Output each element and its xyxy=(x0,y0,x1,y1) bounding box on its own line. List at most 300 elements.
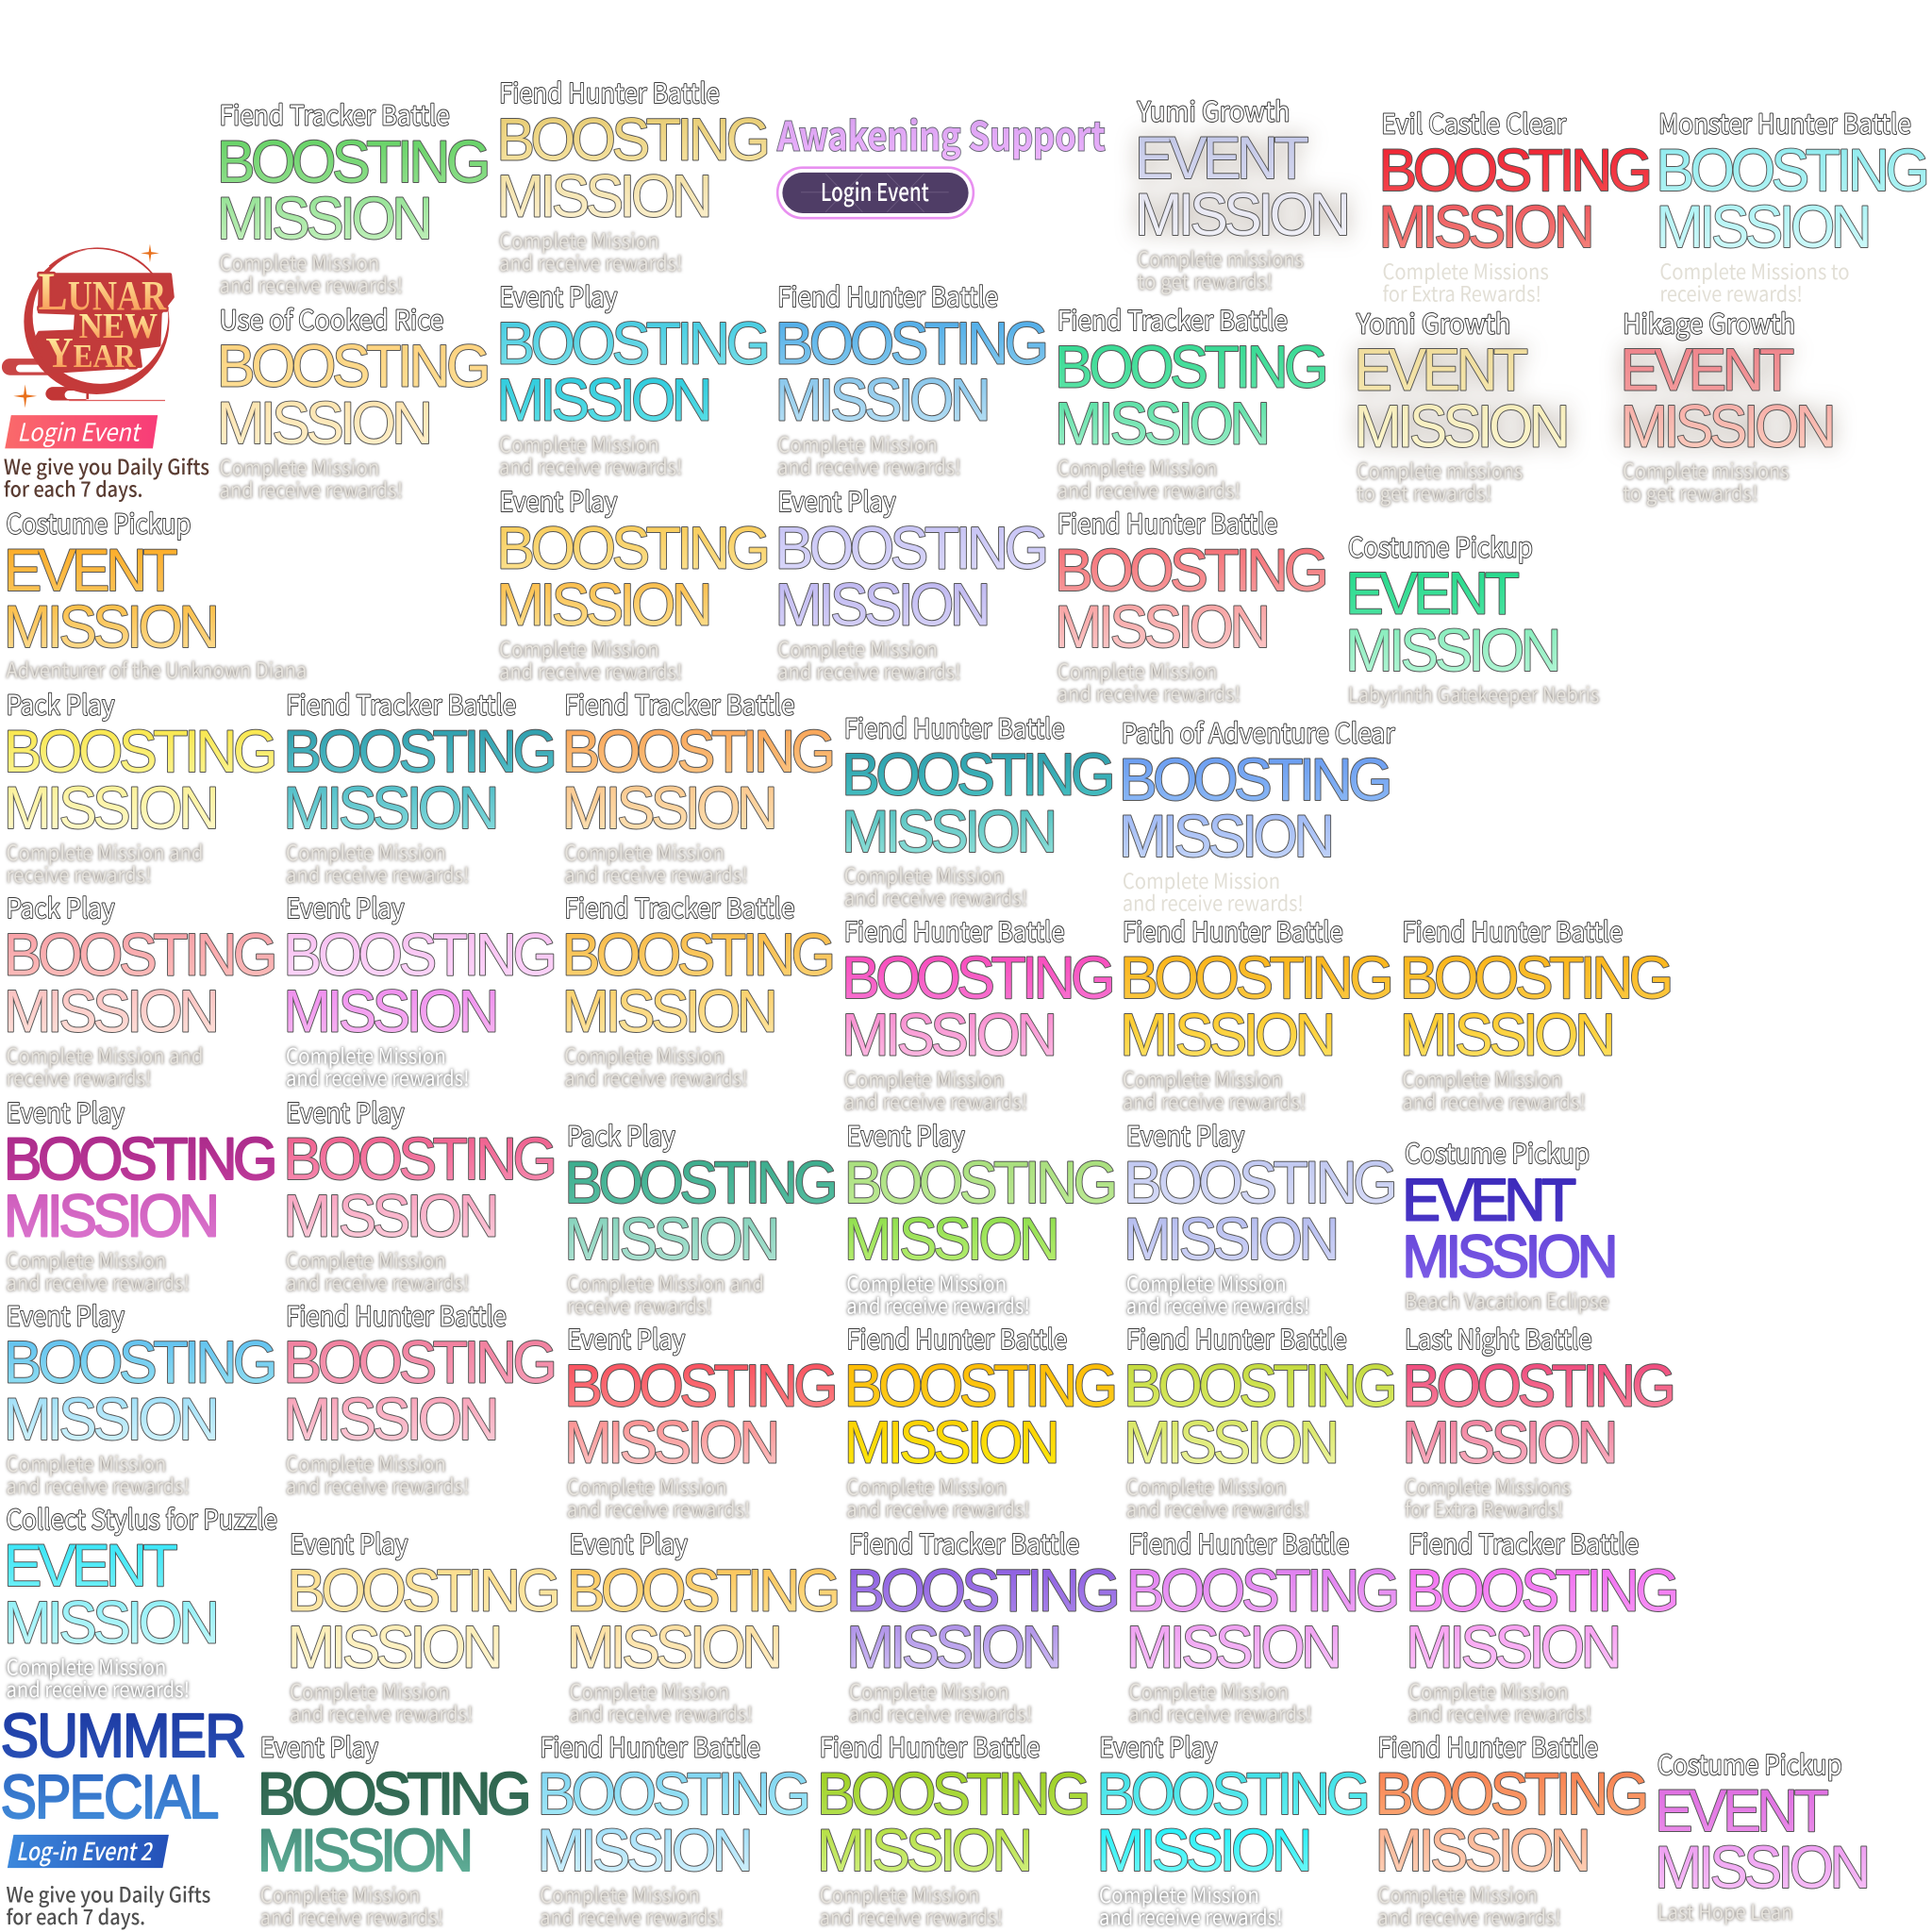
panel: Event Play lavender: Event Play xyxy=(777,481,896,520)
panel: Fiend Tracker Battle green: MISSION xyxy=(217,186,429,252)
panel: Fiend Tracker Battle orange: and receive rewards! xyxy=(564,858,748,889)
panel: Event Play red xyxy=(564,1319,835,1524)
panel: Use of Cooked Rice xyxy=(217,299,488,504)
panel: Fiend Tracker Battle green: and receive rewards! xyxy=(219,269,403,299)
panel: Event Play pale gold xyxy=(287,1524,558,1728)
panel: Fiend Hunter Battle teal: BOOSTING xyxy=(841,742,1112,808)
panel: Fiend Hunter Battle blue: Fiend Hunter Battle xyxy=(777,276,998,315)
panel: Fiend Hunter Battle peach xyxy=(1375,1727,1645,1931)
panel: Fiend Tracker Battle fuchsia: and receive rewards! xyxy=(1408,1698,1592,1728)
description: We give you Daily Gifts xyxy=(4,451,209,481)
panel: Fiend Hunter Battle chartreuse: Fiend Hunter Battle xyxy=(1126,1319,1347,1357)
panel: Event Play apricot: MISSION xyxy=(567,1614,779,1680)
panel: Event Play lime: and receive rewards! xyxy=(846,1291,1030,1321)
tag: log-in event 2: Log-in Event 2 xyxy=(16,1832,153,1868)
panel: Collect Stylus for Puzzle: MISSION xyxy=(4,1590,216,1656)
panel: Fiend Hunter Battle pink: Fiend Hunter Battle xyxy=(286,1295,507,1334)
panel: Event Play periwinkle: MISSION xyxy=(1124,1207,1336,1273)
panel: Fiend Hunter Battle magenta: MISSION xyxy=(841,1002,1054,1068)
panel: Use of Cooked Rice: Use of Cooked Rice xyxy=(219,299,443,338)
panel: Fiend Hunter Battle coral: BOOSTING xyxy=(1055,538,1325,604)
panel: Event Play sky: BOOSTING xyxy=(4,1330,275,1396)
panel: Event Play orchid: and receive rewards! xyxy=(286,1062,470,1092)
panel: Costume Pickup Eclipse: MISSION xyxy=(1402,1224,1614,1290)
panel: Event Play orchid: BOOSTING xyxy=(283,922,554,988)
panel: Yumi Growth event mission: EVENT xyxy=(1135,125,1307,192)
panel: Event Play sky: Event Play xyxy=(7,1295,125,1334)
panel: Fiend Hunter Battle gold one: Complete Mission xyxy=(1123,1063,1283,1093)
panel: Fiend Hunter Battle pink: Complete Mission xyxy=(286,1448,446,1478)
panel: Fiend Hunter Battle teal: MISSION xyxy=(841,799,1054,865)
panel: Event Play rose: MISSION xyxy=(283,1183,495,1249)
panel: Fiend Hunter Battle lime green: and receive rewards! xyxy=(820,1901,1003,1931)
panel: Fiend Hunter Battle lime green: Complete Mission xyxy=(820,1879,979,1909)
panel: Fiend Hunter Battle coral: and receive rewards! xyxy=(1058,677,1241,708)
panel: Fiend Hunter Battle ice blue xyxy=(537,1727,808,1931)
panel: Event Play periwinkle xyxy=(1124,1116,1394,1321)
panel: Event Play purple magenta: Complete Mission xyxy=(7,1244,166,1274)
panel: Event Play teal: Complete Mission xyxy=(499,429,659,459)
panel: Fiend Hunter Battle magenta: Fiend Hunter Battle xyxy=(844,911,1064,950)
panel: Fiend Tracker Battle deep teal: Complete Mission xyxy=(286,837,446,867)
panel: Costume Pickup Eclipse: EVENT xyxy=(1402,1167,1575,1233)
panel: Event Play red: BOOSTING xyxy=(564,1354,835,1420)
panel: Event Play apricot: Event Play xyxy=(569,1524,688,1562)
panel: Fiend Hunter Battle yellow: and receive rewards! xyxy=(499,247,683,277)
icon: lunar new year logo: YEAR xyxy=(45,328,136,376)
panel: Fiend Hunter Battle pink: MISSION xyxy=(283,1387,495,1453)
panel: Costume Pickup Diana: Adventurer of the Unknown Diana xyxy=(7,655,307,685)
panel: Event Play apricot: BOOSTING xyxy=(567,1557,838,1624)
panel: Hikage Growth event mission: Hikage Growth xyxy=(1623,303,1795,341)
panel: Last Night Battle: Last Night Battle xyxy=(1405,1319,1592,1357)
panel: Use of Cooked Rice: and receive rewards! xyxy=(219,474,403,504)
title: summer special xyxy=(1,1701,244,1831)
panel: Fiend Hunter Battle chartreuse xyxy=(1124,1319,1394,1524)
panel: Use of Cooked Rice: BOOSTING xyxy=(217,334,488,400)
panel: Yomi Growth event mission: Complete missions xyxy=(1357,456,1523,486)
panel: Costume Pickup Nebris xyxy=(1345,526,1599,709)
panel: Event Play lavender: Complete Mission xyxy=(777,633,938,663)
panel: Fiend Tracker Battle deep teal: MISSION xyxy=(283,775,495,841)
panel: Fiend Hunter Battle bright yellow: Fiend Hunter Battle xyxy=(846,1319,1067,1357)
description xyxy=(4,451,209,503)
panel: Fiend Hunter Battle teal: Fiend Hunter Battle xyxy=(844,708,1064,746)
button: login event: Login Event xyxy=(821,173,929,208)
panel: Fiend Hunter Battle gold two: BOOSTING xyxy=(1400,945,1671,1011)
panel: Last Night Battle: for Extra Rewards! xyxy=(1405,1493,1563,1524)
panel: Use of Cooked Rice: MISSION xyxy=(217,391,429,457)
panel: Fiend Tracker Battle fuchsia: Complete Mission xyxy=(1408,1675,1569,1706)
panel: Fiend Tracker Battle green: Fiend Tracker Battle xyxy=(219,95,450,134)
panel: Fiend Tracker Battle orange: BOOSTING xyxy=(562,719,832,785)
panel: Event Play aqua: and receive rewards! xyxy=(1099,1901,1283,1931)
panel: Event Play amber: and receive rewards! xyxy=(499,656,683,686)
panel: Event Play amber: MISSION xyxy=(496,572,708,638)
panel: Fiend Hunter Battle gold two: MISSION xyxy=(1400,1002,1612,1068)
panel: Costume Pickup Lean: Costume Pickup xyxy=(1657,1744,1842,1783)
panel: Fiend Hunter Battle gold two xyxy=(1400,911,1671,1116)
panel: Event Play lavender: MISSION xyxy=(775,572,987,638)
panel: Event Play amber xyxy=(496,481,767,686)
panel: Evil Castle Clear red: MISSION xyxy=(1379,194,1591,260)
panel: Fiend Hunter Battle peach: MISSION xyxy=(1375,1818,1588,1884)
panel: Event Play orchid xyxy=(283,888,554,1092)
panel: Pack Play pink: BOOSTING xyxy=(4,922,275,988)
panel: Event Play periwinkle: and receive rewards! xyxy=(1126,1291,1309,1321)
panel: Costume Pickup Eclipse xyxy=(1402,1133,1614,1315)
panel: Pack Play yellow: Pack Play xyxy=(7,685,114,724)
button: login event xyxy=(777,168,974,218)
panel: Event Play periwinkle: Complete Mission xyxy=(1126,1268,1287,1298)
panel: Event Play teal: and receive rewards! xyxy=(499,451,683,481)
panel: Event Play amber: BOOSTING xyxy=(496,515,767,581)
description: for each 7 days. xyxy=(4,473,143,503)
panel: Fiend Hunter Battle magenta: BOOSTING xyxy=(841,945,1112,1011)
panel: Event Play purple magenta xyxy=(4,1092,275,1297)
panel: Fiend Hunter Battle blue: Complete Mission xyxy=(777,429,938,459)
panel: Event Play sky: and receive rewards! xyxy=(7,1470,190,1500)
panel: Event Play pale gold: Complete Mission xyxy=(290,1675,450,1706)
panel: Fiend Hunter Battle orchid: Fiend Hunter Battle xyxy=(1128,1524,1349,1562)
panel: Event Play red: MISSION xyxy=(564,1410,776,1476)
panel: Event Play lavender: and receive rewards! xyxy=(777,656,961,686)
panel: Pack Play sea green xyxy=(564,1116,835,1321)
panel: Fiend Hunter Battle ice blue: MISSION xyxy=(537,1818,749,1884)
panel: Fiend Tracker Battle gold: and receive rewards! xyxy=(564,1062,748,1092)
panel: Fiend Hunter Battle pink: and receive rewards! xyxy=(286,1470,470,1500)
panel: Fiend Hunter Battle blue: and receive rewards! xyxy=(777,451,961,481)
panel: Summer Special login event xyxy=(1,1701,244,1931)
panel: Fiend Tracker Battle fuchsia: BOOSTING xyxy=(1406,1557,1676,1624)
panel: Costume Pickup Nebris: Costume Pickup xyxy=(1348,526,1533,565)
panel: Fiend Hunter Battle gold one: MISSION xyxy=(1120,1002,1332,1068)
panel: Yumi Growth event mission xyxy=(1135,92,1347,296)
panel: Yumi Growth event mission: to get rewards! xyxy=(1138,266,1273,296)
panel: Fiend Hunter Battle blue: BOOSTING xyxy=(775,311,1045,377)
panel: Pack Play pink: MISSION xyxy=(4,978,216,1044)
panel: Fiend Hunter Battle yellow xyxy=(496,73,767,277)
panel: Fiend Hunter Battle gold two: Fiend Hunter Battle xyxy=(1402,911,1623,950)
panel: Fiend Hunter Battle bright yellow: and receive rewards! xyxy=(846,1493,1030,1524)
panel: Costume Pickup Eclipse: Beach Vacation Eclipse xyxy=(1405,1285,1609,1315)
panel: Path of Adventure Clear xyxy=(1119,713,1395,917)
panel: Costume Pickup Lean xyxy=(1655,1744,1867,1926)
panel: Path of Adventure Clear: Complete Mission xyxy=(1123,865,1280,895)
panel: Costume Pickup Lean: Last Hope Lean xyxy=(1657,1896,1792,1926)
panel: Yomi Growth event mission: MISSION xyxy=(1354,394,1566,460)
panel: Collect Stylus for Puzzle: Collect Stylus for Puzzle xyxy=(7,1499,277,1538)
panel: Event Play lime xyxy=(844,1116,1115,1321)
description: for each 7 days. xyxy=(7,1901,145,1931)
panel: Event Play lime: Event Play xyxy=(846,1116,965,1155)
panel: Fiend Tracker Battle fuchsia: MISSION xyxy=(1406,1614,1618,1680)
panel: Fiend Tracker Battle deep teal: Fiend Tracker Battle xyxy=(286,685,516,724)
panel: Yumi Growth event mission: MISSION xyxy=(1135,182,1347,248)
panel: Event Play sky xyxy=(4,1295,275,1500)
panel: Fiend Hunter Battle lime green: MISSION xyxy=(817,1818,1029,1884)
panel: Fiend Hunter Battle blue: MISSION xyxy=(775,368,987,434)
panel: Evil Castle Clear red: BOOSTING xyxy=(1379,138,1649,204)
panel: Event Play teal: BOOSTING xyxy=(496,311,767,377)
panel: Monster Hunter Battle cyan xyxy=(1656,104,1926,308)
panel: Costume Pickup Diana: EVENT xyxy=(4,538,176,604)
panel: Event Play rose xyxy=(283,1092,554,1297)
panel: Fiend Tracker Battle violet: BOOSTING xyxy=(846,1557,1117,1624)
panel: Fiend Tracker Battle emerald: and receive rewards! xyxy=(1058,475,1241,505)
panel: Pack Play yellow: receive rewards! xyxy=(7,858,152,889)
panel: Yomi Growth event mission xyxy=(1354,303,1566,508)
title: summer special: SPECIAL xyxy=(1,1762,218,1831)
panel: Pack Play sea green: Pack Play xyxy=(567,1116,675,1155)
icon: lunar new year logo: LUNAR xyxy=(38,262,167,322)
panel: Fiend Hunter Battle yellow: BOOSTING xyxy=(496,107,767,173)
panel: Event Play rose: BOOSTING xyxy=(283,1126,554,1192)
panel: Fiend Tracker Battle gold: BOOSTING xyxy=(562,922,832,988)
panel: Fiend Hunter Battle yellow: Fiend Hunter Battle xyxy=(499,73,720,111)
panel: Event Play lavender: BOOSTING xyxy=(775,515,1045,581)
panel: Fiend Tracker Battle fuchsia: Fiend Tracker Battle xyxy=(1408,1524,1639,1562)
panel: Fiend Hunter Battle peach: Complete Mission xyxy=(1377,1879,1538,1909)
panel: Pack Play yellow: BOOSTING xyxy=(4,719,275,785)
panel: Fiend Hunter Battle lime green: BOOSTING xyxy=(817,1761,1088,1827)
panel: Pack Play sea green: BOOSTING xyxy=(564,1150,835,1216)
panel: Event Play lavender xyxy=(775,481,1045,686)
panel: Event Play red: Complete Mission xyxy=(567,1472,727,1502)
panel: Fiend Tracker Battle gold: Complete Mission xyxy=(564,1040,724,1070)
panel: Event Play forest green: and receive rewards! xyxy=(260,1901,443,1931)
panel: Fiend Hunter Battle orchid: and receive rewards! xyxy=(1128,1698,1312,1728)
panel: Fiend Tracker Battle emerald: Complete Mission xyxy=(1058,452,1217,482)
panel: Yomi Growth event mission: Yomi Growth xyxy=(1356,303,1510,341)
panel: Fiend Hunter Battle yellow: MISSION xyxy=(496,163,708,229)
panel: Fiend Hunter Battle teal xyxy=(841,708,1112,912)
panel: Monster Hunter Battle cyan: Monster Hunter Battle xyxy=(1658,104,1911,142)
panel: Fiend Hunter Battle lime green xyxy=(817,1727,1088,1931)
panel: Fiend Hunter Battle peach: and receive rewards! xyxy=(1377,1901,1561,1931)
panel: Fiend Hunter Battle bright yellow xyxy=(844,1319,1115,1524)
panel: Monster Hunter Battle cyan: Complete Missions to xyxy=(1659,256,1849,286)
panel: Hikage Growth event mission xyxy=(1621,303,1832,508)
panel: Event Play purple magenta: BOOSTING xyxy=(4,1126,275,1192)
panel: Fiend Tracker Battle violet: and receive rewards! xyxy=(849,1698,1033,1728)
panel: Event Play apricot: and receive rewards! xyxy=(569,1698,753,1728)
panel: Pack Play yellow: MISSION xyxy=(4,775,216,841)
panel: Fiend Hunter Battle magenta: and receive rewards! xyxy=(844,1086,1027,1116)
panel: Costume Pickup Lean: MISSION xyxy=(1655,1835,1867,1901)
panel: Fiend Tracker Battle orange xyxy=(562,685,832,889)
panel: Fiend Hunter Battle gold one: and receive rewards! xyxy=(1123,1086,1306,1116)
panel: Pack Play pink: Complete Mission and xyxy=(7,1040,204,1070)
panel: Fiend Hunter Battle peach: BOOSTING xyxy=(1375,1761,1645,1827)
panel: Awakening Support login event xyxy=(776,106,1106,218)
panel: Event Play sky: MISSION xyxy=(4,1387,216,1453)
panel: Fiend Tracker Battle orange: Complete Mission xyxy=(564,837,724,867)
panel: Collect Stylus for Puzzle xyxy=(4,1499,277,1704)
panel: Costume Pickup Eclipse: Costume Pickup xyxy=(1405,1133,1590,1172)
panel: Event Play forest green: Event Play xyxy=(260,1727,378,1766)
panel: Collect Stylus for Puzzle: Complete Mission xyxy=(7,1651,166,1681)
panel: Event Play pale gold: MISSION xyxy=(287,1614,499,1680)
panel: Event Play teal: MISSION xyxy=(496,368,708,434)
panel: Fiend Tracker Battle violet: Fiend Tracker Battle xyxy=(849,1524,1079,1562)
panel: Event Play red: Event Play xyxy=(567,1319,685,1357)
panel: Last Night Battle xyxy=(1402,1319,1673,1524)
panel: Costume Pickup Nebris: MISSION xyxy=(1345,618,1557,684)
title: summer special: SUMMER xyxy=(1,1701,244,1770)
panel: Fiend Tracker Battle green: Complete Mission xyxy=(219,247,379,277)
panel: Fiend Hunter Battle orchid: BOOSTING xyxy=(1126,1557,1397,1624)
panel: Costume Pickup Nebris: EVENT xyxy=(1345,561,1519,627)
panel: Fiend Hunter Battle teal: and receive rewards! xyxy=(844,882,1027,912)
panel: Fiend Tracker Battle emerald: BOOSTING xyxy=(1055,334,1325,400)
panel: Fiend Tracker Battle deep teal xyxy=(283,685,554,889)
panel: Collect Stylus for Puzzle: EVENT xyxy=(4,1533,176,1599)
panel: Costume Pickup Diana xyxy=(4,504,307,685)
panel: Fiend Hunter Battle gold two: Complete Mission xyxy=(1402,1063,1562,1093)
panel: Fiend Hunter Battle coral: Fiend Hunter Battle xyxy=(1058,504,1277,542)
panel: Fiend Hunter Battle magenta xyxy=(841,911,1112,1116)
panel: Evil Castle Clear red: for Extra Rewards! xyxy=(1382,278,1541,308)
panel: Lunar New Year login event xyxy=(2,244,209,503)
panel: Last Night Battle: MISSION xyxy=(1402,1410,1614,1476)
panel: Event Play pale gold: BOOSTING xyxy=(287,1557,558,1624)
panel: Fiend Hunter Battle pink: BOOSTING xyxy=(283,1330,554,1396)
panel: Fiend Hunter Battle peach: Fiend Hunter Battle xyxy=(1377,1727,1598,1766)
panel: Fiend Hunter Battle gold one: BOOSTING xyxy=(1120,945,1391,1011)
panel: Fiend Hunter Battle teal: Complete Mission xyxy=(844,860,1004,891)
description xyxy=(7,1879,210,1931)
heading: Awakening Support xyxy=(776,106,1106,162)
panel: Fiend Hunter Battle coral: MISSION xyxy=(1055,594,1267,660)
panel: Fiend Hunter Battle gold two: and receive rewards! xyxy=(1402,1086,1586,1116)
panel: Path of Adventure Clear: and receive rewards! xyxy=(1123,887,1304,917)
panel: Event Play teal xyxy=(496,276,767,481)
panel: Pack Play sea green: receive rewards! xyxy=(567,1291,712,1321)
panel: Hikage Growth event mission: Complete missions xyxy=(1623,456,1789,486)
panel: Event Play periwinkle: Event Play xyxy=(1126,1116,1244,1155)
panel: Event Play rose: and receive rewards! xyxy=(286,1267,470,1297)
panel: Event Play purple magenta: Event Play xyxy=(7,1092,125,1131)
panel: Evil Castle Clear red: Complete Missions xyxy=(1382,256,1549,286)
panel: Path of Adventure Clear: Path of Adventure Clear xyxy=(1122,713,1395,752)
panel: Event Play purple magenta: MISSION xyxy=(4,1183,216,1249)
panel: Fiend Tracker Battle green xyxy=(217,95,488,299)
panel: Fiend Hunter Battle coral xyxy=(1055,504,1325,708)
panel: Fiend Tracker Battle deep teal: BOOSTING xyxy=(283,719,554,785)
panel: Event Play orchid: MISSION xyxy=(283,978,495,1044)
panel: Fiend Tracker Battle fuchsia xyxy=(1406,1524,1676,1728)
panel: Fiend Hunter Battle chartreuse: BOOSTING xyxy=(1124,1354,1394,1420)
panel: Fiend Hunter Battle orchid: MISSION xyxy=(1126,1614,1339,1680)
panel: Monster Hunter Battle cyan: receive rewards! xyxy=(1659,278,1803,308)
panel: Pack Play sea green: MISSION xyxy=(564,1207,776,1273)
panel: Event Play orchid: Event Play xyxy=(286,888,404,926)
panel: Costume Pickup Diana: Costume Pickup xyxy=(7,504,191,542)
panel: Monster Hunter Battle cyan: BOOSTING xyxy=(1656,138,1926,204)
panel: Event Play aqua: BOOSTING xyxy=(1096,1761,1367,1827)
panel: Yomi Growth event mission: to get rewards! xyxy=(1357,477,1492,508)
panel: Event Play rose: Complete Mission xyxy=(286,1244,446,1274)
panel: Fiend Hunter Battle ice blue: and receive rewards! xyxy=(540,1901,724,1931)
panel: Event Play aqua: Complete Mission xyxy=(1099,1879,1259,1909)
panel: Event Play aqua: Event Play xyxy=(1099,1727,1217,1766)
panel: Event Play lime: Complete Mission xyxy=(846,1268,1007,1298)
panel: Hikage Growth event mission: EVENT xyxy=(1621,338,1793,404)
panel: Fiend Hunter Battle pink xyxy=(283,1295,554,1500)
panel: Fiend Hunter Battle gold one xyxy=(1120,911,1391,1116)
panel: Event Play lime: MISSION xyxy=(844,1207,1057,1273)
icon: lunar new year logo xyxy=(2,244,173,408)
panel: Yumi Growth event mission: Yumi Growth xyxy=(1137,92,1291,130)
panel: Event Play red: and receive rewards! xyxy=(567,1493,750,1524)
panel: Fiend Hunter Battle chartreuse: Complete Mission xyxy=(1126,1472,1287,1502)
panel: Fiend Hunter Battle bright yellow: BOOSTING xyxy=(844,1354,1115,1420)
panel: Event Play aqua: MISSION xyxy=(1096,1818,1308,1884)
panel: Pack Play pink: Pack Play xyxy=(7,888,114,926)
panel: Fiend Hunter Battle orchid xyxy=(1126,1524,1397,1728)
panel: Fiend Tracker Battle gold: Fiend Tracker Battle xyxy=(564,888,794,926)
panel: Event Play sky: Complete Mission xyxy=(7,1448,166,1478)
panel: Fiend Tracker Battle green: BOOSTING xyxy=(217,129,488,195)
panel: Hikage Growth event mission: to get rewards! xyxy=(1623,477,1758,508)
panel: Fiend Hunter Battle blue xyxy=(775,276,1045,481)
panel: Costume Pickup Nebris: Labyrinth Gatekeeper Nebris xyxy=(1348,679,1599,709)
panel: Event Play amber: Complete Mission xyxy=(499,633,659,663)
panel: Fiend Hunter Battle ice blue: Fiend Hunter Battle xyxy=(540,1727,760,1766)
panel: Fiend Tracker Battle orange: Fiend Tracker Battle xyxy=(564,685,794,724)
panel: Costume Pickup Diana: MISSION xyxy=(4,594,216,660)
panel: Pack Play pink: receive rewards! xyxy=(7,1062,152,1092)
panel: Fiend Hunter Battle chartreuse: and receive rewards! xyxy=(1126,1493,1309,1524)
panel: Event Play aqua xyxy=(1096,1727,1367,1931)
panel: Evil Castle Clear red xyxy=(1379,104,1649,308)
panel: Fiend Hunter Battle coral: Complete Mission xyxy=(1058,656,1217,686)
description: We give you Daily Gifts xyxy=(7,1879,210,1909)
panel: Fiend Hunter Battle ice blue: BOOSTING xyxy=(537,1761,808,1827)
panel: Yomi Growth event mission: EVENT xyxy=(1354,338,1527,404)
panel: Event Play lime: BOOSTING xyxy=(844,1150,1115,1216)
panel: Fiend Hunter Battle bright yellow: Complete Mission xyxy=(846,1472,1007,1502)
panel: Monster Hunter Battle cyan: MISSION xyxy=(1656,194,1868,260)
panel: Event Play pale gold: and receive rewards! xyxy=(290,1698,474,1728)
icon: lunar new year logo: NEW xyxy=(79,307,158,346)
panel: Fiend Hunter Battle chartreuse: MISSION xyxy=(1124,1410,1336,1476)
panel: Fiend Hunter Battle lime green: Fiend Hunter Battle xyxy=(820,1727,1040,1766)
panel: Fiend Tracker Battle emerald: MISSION xyxy=(1055,391,1267,457)
panel: Path of Adventure Clear: MISSION xyxy=(1119,804,1331,870)
panel: Collect Stylus for Puzzle: and receive rewards! xyxy=(7,1674,190,1704)
panel: Event Play apricot: Complete Mission xyxy=(569,1675,729,1706)
panel: Event Play forest green: Complete Mission xyxy=(260,1879,420,1909)
panel: Event Play forest green: BOOSTING xyxy=(258,1761,528,1827)
panel: Use of Cooked Rice: Complete Mission xyxy=(219,452,379,482)
panel: Fiend Tracker Battle violet: Complete Mission xyxy=(849,1675,1009,1706)
panel: Event Play pale gold: Event Play xyxy=(290,1524,408,1562)
panel: Pack Play yellow: Complete Mission and xyxy=(7,837,204,867)
panel: Yumi Growth event mission: Complete missions xyxy=(1138,243,1304,274)
panel: Evil Castle Clear red: Evil Castle Clear xyxy=(1381,104,1567,142)
panel: Fiend Tracker Battle deep teal: and receive rewards! xyxy=(286,858,470,889)
panel: Pack Play pink xyxy=(4,888,275,1092)
panel: Event Play orchid: Complete Mission xyxy=(286,1040,446,1070)
panel: Event Play purple magenta: and receive rewards! xyxy=(7,1267,190,1297)
panel: Fiend Hunter Battle yellow: Complete Mission xyxy=(499,225,659,255)
panel: Event Play amber: Event Play xyxy=(499,481,617,520)
panel: Fiend Tracker Battle violet: MISSION xyxy=(846,1614,1058,1680)
panel: Fiend Tracker Battle violet xyxy=(846,1524,1117,1728)
panel: Fiend Tracker Battle gold: MISSION xyxy=(562,978,774,1044)
